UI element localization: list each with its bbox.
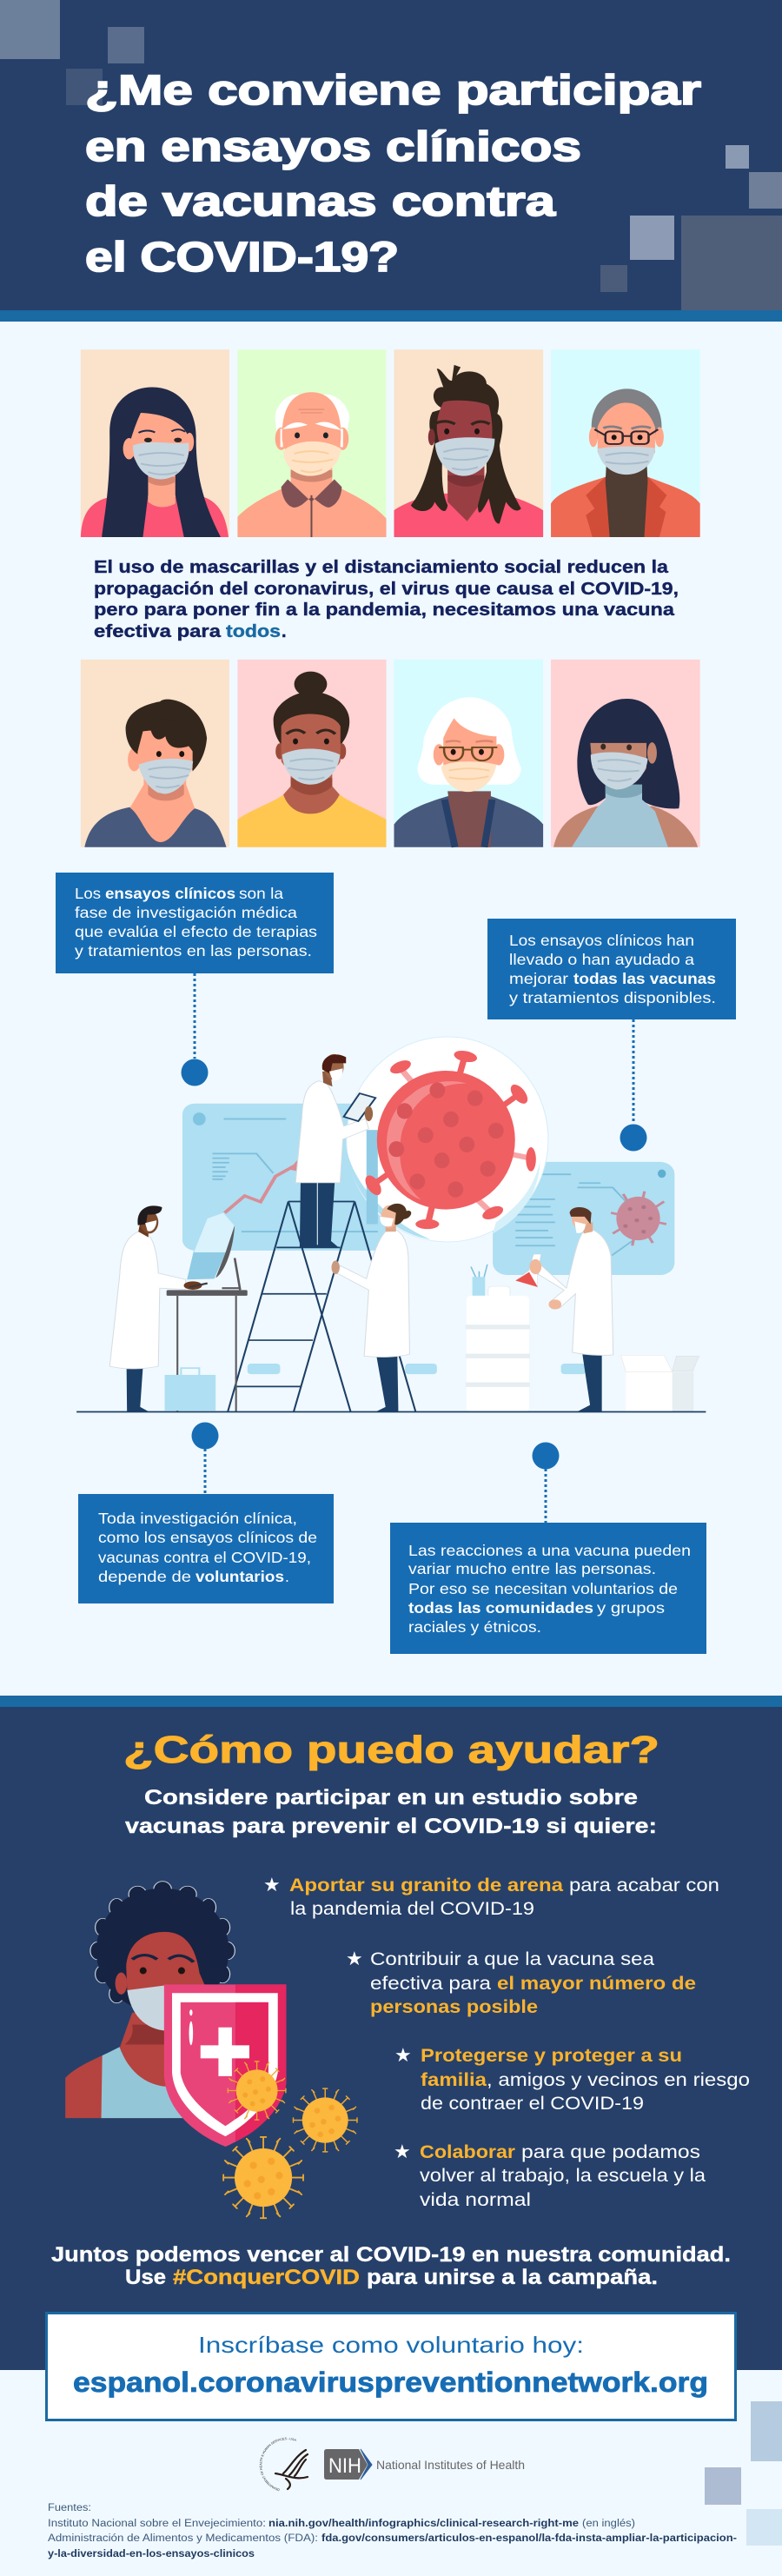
- callout: voluntarios: depende de: [98, 1568, 191, 1585]
- callout: mejorar vacunas: y tratamientos disponibles.: [509, 989, 716, 1006]
- intro paragraph: pero para poner fin a la pandemia, necesitamos una vacuna: [94, 601, 675, 620]
- closing statement: Juntos podemos vencer al COVID-19 en nuestra comunidad.: [51, 2243, 731, 2267]
- callout: ensayos clínicos definition: Los: [75, 885, 101, 902]
- portrait: woman with dark hair and bangs: [551, 660, 700, 847]
- call to action box: [47, 2314, 735, 2420]
- benefit 2: [346, 1948, 696, 2017]
- closing statement: [51, 2243, 731, 2289]
- benefit 2: el mayor número de: [497, 1974, 696, 1994]
- benefit 2: Contribuir a que la vacuna sea: [370, 1949, 654, 1969]
- logo: HHS: DEPARTMENT OF HEALTH & HUMAN SERVICES - USA: [259, 2437, 295, 2491]
- closing statement: para unirse a la campaña.: [367, 2266, 658, 2289]
- sources: Administración de Alimentos y Medicamentos (FDA):: [48, 2533, 318, 2544]
- callout: mejorar vacunas: llevado o han ayudado a: [509, 951, 694, 968]
- benefit 4: Colaborar: [420, 2142, 515, 2162]
- callout: mejorar vacunas: [487, 919, 736, 1019]
- benefit 4: para que podamos: [521, 2142, 700, 2162]
- connector dot 2: [620, 1019, 646, 1151]
- scientist at computer: [109, 1205, 202, 1411]
- hair: [90, 1882, 235, 2014]
- subheading: [125, 1786, 657, 1838]
- closing statement: Use: [125, 2266, 166, 2289]
- benefit 4: ★: [394, 2141, 411, 2162]
- shield: [164, 1984, 286, 2147]
- lab illustration: [76, 1037, 706, 1411]
- benefit 1: Aportar su granito de arena: [289, 1876, 563, 1895]
- help section background: [0, 1696, 782, 2370]
- portrait: older bald man: [237, 349, 387, 537]
- benefit 3: Protegerse y proteger a su: [421, 2046, 682, 2066]
- callout: voluntarios: como los ensayos clínicos de: [98, 1529, 317, 1546]
- call to action box: Inscríbase como voluntario hoy:: [198, 2332, 584, 2358]
- title: ¿Me conviene participar: [85, 68, 701, 114]
- virus particles: [223, 2061, 357, 2218]
- screen: chart panel: [182, 1104, 396, 1251]
- callout: reacciones: raciales y étnicos.: [408, 1618, 541, 1636]
- sources: Instituto Nacional sobre el Envejecimiento:: [48, 2519, 266, 2529]
- benefit 4: volver al trabajo, la escuela y la: [420, 2166, 706, 2186]
- logo: NIH: National Institutes of Health: [376, 2459, 525, 2472]
- callout: reacciones: Por eso se necesitan voluntarios de: [408, 1580, 678, 1597]
- header banner: [0, 0, 782, 322]
- scientist on ladder: [295, 1054, 375, 1248]
- intro paragraph: El uso de mascarillas y el distanciamiento social reducen la: [94, 558, 669, 577]
- callout: voluntarios: voluntarios: [196, 1568, 284, 1585]
- virus bubble: [346, 1037, 548, 1242]
- callout: mejorar vacunas: mejorar: [509, 970, 568, 987]
- benefit 3: de contraer el COVID-19: [421, 2094, 644, 2114]
- callout: reacciones: todas las comunidades: [408, 1599, 593, 1617]
- benefit 3: , amigos y vecinos en riesgo: [487, 2070, 750, 2090]
- cardboard box: [621, 1355, 699, 1411]
- heading: cómo puedo ayudar: ¿Cómo puedo ayudar?: [123, 1729, 659, 1771]
- callout: reacciones: y grupos: [597, 1599, 665, 1617]
- callout: ensayos clínicos definition: ensayos clínicos: [105, 885, 235, 902]
- benefit 4: vida normal: [420, 2190, 531, 2210]
- benefit 2: personas posible: [370, 1997, 538, 2017]
- subheading: Considere participar en un estudio sobre: [144, 1786, 638, 1809]
- callout: voluntarios: vacunas contra el COVID-19,: [98, 1549, 311, 1566]
- ladder: [228, 1201, 415, 1411]
- portrait: older woman with white hair: [394, 660, 543, 847]
- floor pills: [248, 1364, 586, 1374]
- callout: mejorar vacunas: Los ensayos clínicos han: [509, 932, 694, 949]
- benefit 1: la pandemia del COVID-19: [290, 1899, 534, 1919]
- benefit 1: [263, 1874, 719, 1919]
- illustration: person behind shield: [65, 1882, 357, 2218]
- callout: ensayos clínicos definition: que evalúa el efecto de terapias: [75, 923, 317, 940]
- callout: voluntarios: Toda investigación clínica,: [98, 1510, 297, 1527]
- sources: Fuentes:: [48, 2503, 91, 2513]
- floor line: [76, 1410, 706, 1413]
- logo: NIH: NIH: [328, 2454, 361, 2478]
- sources: fda.gov/consumers/articulos-en-espanol/la-fda-insta-ampliar-la-participacion-: [321, 2533, 737, 2544]
- scientist with flask: [515, 1207, 613, 1411]
- briefcase: [165, 1368, 215, 1411]
- portrait: older man with glasses: [551, 349, 700, 537]
- connector dot 4: [532, 1443, 560, 1523]
- subheading: vacunas para prevenir el COVID-19 si quiere:: [125, 1815, 657, 1838]
- connector dot 1: [181, 973, 209, 1086]
- benefit 1: ★: [263, 1874, 281, 1895]
- title: en ensayos clínicos: [85, 124, 581, 170]
- sources: y-la-diversidad-en-los-ensayos-clinicos: [48, 2549, 255, 2559]
- call to action box: espanol.coronaviruspreventionnetwork.org: [73, 2367, 708, 2398]
- sources: [48, 2503, 737, 2559]
- intro paragraph: efectiva para: [94, 622, 222, 641]
- benefit 2: efectiva para: [370, 1974, 491, 1994]
- callout: ensayos clínicos definition: son la: [239, 885, 283, 902]
- portrait: woman with long dark hair: [81, 349, 229, 537]
- scientist holding ladder: [331, 1204, 411, 1411]
- callout: ensayos clínicos definition: y tratamientos en las personas.: [75, 942, 312, 959]
- portraits grid: [81, 349, 700, 847]
- title: de vacunas contra: [85, 179, 555, 225]
- callout: reacciones: [390, 1523, 706, 1654]
- callout: voluntarios: .: [285, 1568, 289, 1585]
- callout: ensayos clínicos definition: [56, 873, 334, 973]
- benefit 1: para acabar con: [569, 1876, 719, 1895]
- logo: NIH: [324, 2449, 525, 2480]
- computer desk: [167, 1212, 248, 1411]
- benefit 4: [394, 2141, 706, 2210]
- benefit 2: ★: [346, 1948, 363, 1969]
- closing statement: #ConquerCOVID: [173, 2266, 360, 2289]
- title: el COVID-19?: [85, 235, 399, 281]
- portrait: person with hair bun: [237, 660, 387, 847]
- callout: reacciones: Las reacciones a una vacuna pueden: [408, 1542, 691, 1559]
- intro paragraph: .: [282, 622, 287, 641]
- intro paragraph: todos: [226, 622, 281, 641]
- cabinet with supplies: [466, 1265, 530, 1411]
- sources: nia.nih.gov/health/infographics/clinical-research-right-me: [268, 2519, 579, 2529]
- benefit 3: [394, 2044, 750, 2114]
- title: [85, 68, 701, 281]
- benefit 3: familia: [421, 2070, 487, 2090]
- callout: ensayos clínicos definition: fase de investigación médica: [75, 904, 297, 921]
- portrait: person with short dark hair: [81, 660, 229, 847]
- sources: (en inglés): [582, 2519, 635, 2529]
- connector dot 3: [191, 1422, 219, 1494]
- callout: mejorar vacunas: todas las vacunas: [573, 970, 716, 987]
- intro paragraph: [94, 558, 679, 641]
- benefit 3: ★: [394, 2044, 412, 2066]
- screen: virus panel: [493, 1162, 674, 1275]
- intro paragraph: propagación del coronavirus, el virus que causa el COVID-19,: [94, 580, 679, 599]
- callout: voluntarios: [78, 1494, 334, 1603]
- body and face: [65, 1932, 207, 2118]
- portrait: man with dreadlocks: [394, 349, 543, 537]
- decorative squares bottom: [705, 2401, 782, 2546]
- callout: reacciones: variar mucho entre las personas.: [408, 1560, 656, 1577]
